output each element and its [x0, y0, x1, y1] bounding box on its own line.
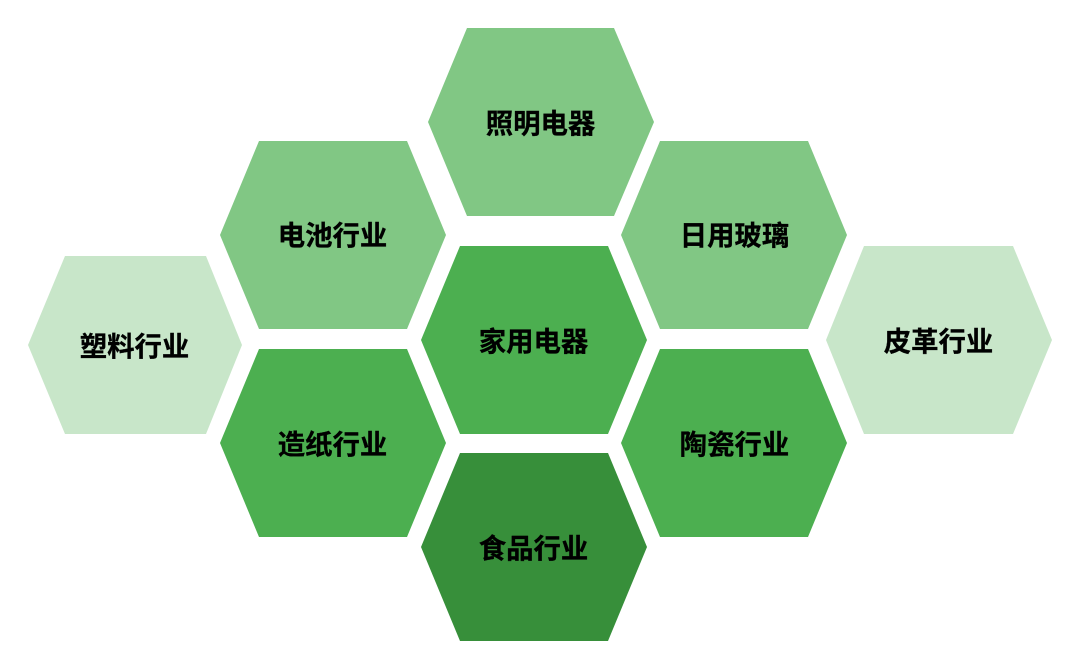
hexagon: 陶瓷行业 [621, 349, 847, 537]
hexagon: 食品行业 [421, 453, 647, 641]
hexagon: 造纸行业 [220, 349, 446, 537]
hexagon: 日用玻璃: 日用玻璃 [680, 220, 789, 251]
hexagon: 造纸行业: 造纸行业 [278, 429, 387, 460]
hexagon: 家用电器: 家用电器 [479, 326, 589, 357]
hexagon: 照明电器 [428, 28, 654, 216]
hexagon: 皮革行业: 皮革行业 [884, 326, 993, 357]
hexagon: 电池行业: 电池行业 [278, 220, 387, 251]
hexagon: 陶瓷行业: 陶瓷行业 [680, 429, 789, 460]
hexagon: 家用电器 [421, 246, 647, 434]
hexagon: 塑料行业: 塑料行业 [80, 331, 189, 362]
hexagon: 塑料行业 [28, 256, 242, 434]
hexagon: 照明电器: 照明电器 [486, 108, 596, 139]
hexagon: 日用玻璃 [621, 141, 847, 329]
hexagon: 皮革行业 [826, 246, 1052, 434]
hexagon: 电池行业 [220, 141, 446, 329]
hexagon: 食品行业: 食品行业 [479, 533, 588, 564]
